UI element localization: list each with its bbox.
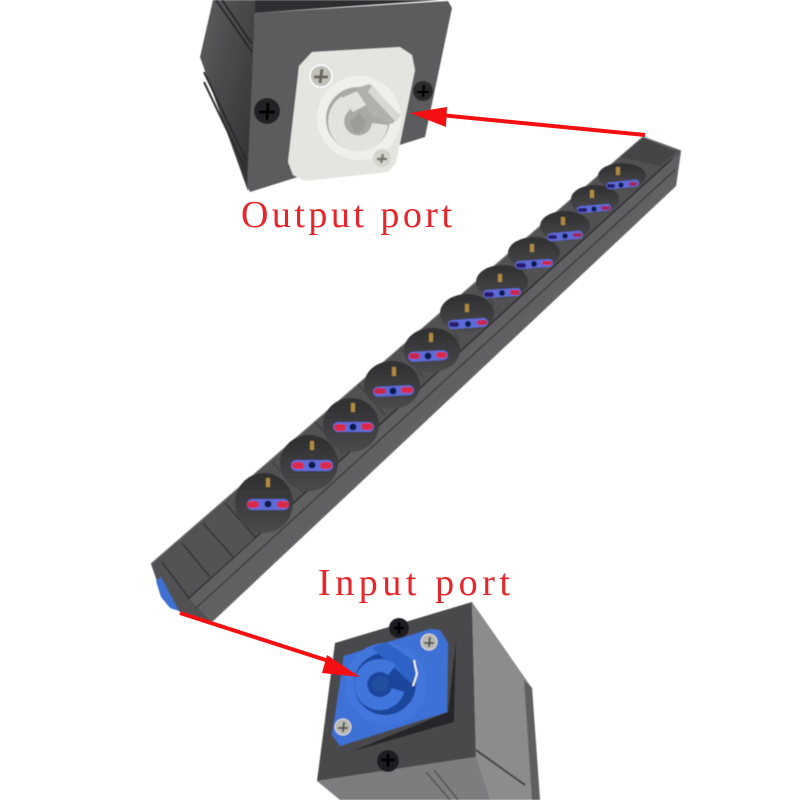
arrow to output port bbox=[410, 107, 645, 135]
end cap panel bbox=[620, 138, 676, 166]
output port photo bbox=[200, 0, 452, 192]
blue connector end bbox=[156, 577, 179, 611]
left screw bbox=[254, 98, 280, 124]
white plate screw top bbox=[310, 65, 332, 87]
socket 8 bbox=[508, 237, 560, 269]
socket 11 bbox=[598, 163, 646, 190]
socket 1 bbox=[235, 473, 293, 533]
blank panels bbox=[162, 504, 256, 597]
socket 9 bbox=[540, 211, 590, 242]
socket 10 bbox=[571, 185, 619, 213]
blue plate bbox=[332, 629, 448, 746]
socket 5 bbox=[404, 328, 460, 372]
blue plate screw bottom bbox=[335, 719, 351, 735]
right screw bbox=[413, 81, 433, 101]
enclosure bottom bbox=[317, 757, 490, 800]
socket 4 bbox=[364, 361, 420, 409]
enclosure face bbox=[317, 602, 476, 781]
arrow to input port bbox=[180, 613, 360, 677]
enclosure side bbox=[200, 0, 255, 191]
socket 2 bbox=[280, 435, 338, 491]
strip body bbox=[151, 137, 681, 622]
white connector slot bbox=[356, 84, 400, 124]
socket 7 bbox=[476, 265, 528, 299]
top screw bbox=[389, 618, 409, 638]
blue slot bbox=[372, 642, 418, 684]
white connector plate bbox=[288, 47, 415, 181]
blue plate shadow bbox=[350, 640, 456, 752]
blue core bbox=[361, 666, 398, 704]
output port label: Output port bbox=[241, 194, 452, 236]
socket dividers bbox=[272, 176, 612, 491]
input port photo bbox=[317, 602, 540, 800]
blue plate screw top bbox=[421, 634, 437, 650]
enclosure face bbox=[247, 1, 452, 192]
enclosure top edge bbox=[255, 0, 440, 13]
enclosure right side bbox=[472, 602, 540, 800]
socket 6 bbox=[440, 294, 494, 332]
blue ring bbox=[345, 643, 427, 725]
socket 3 bbox=[323, 398, 379, 452]
white connector ring bbox=[317, 76, 401, 160]
white connector core bbox=[336, 103, 380, 143]
white plate screw bottom bbox=[373, 149, 391, 167]
strip side rail bbox=[189, 151, 681, 622]
input port label: Input port bbox=[318, 562, 510, 604]
bottom screw bbox=[377, 750, 399, 772]
power strip bbox=[151, 137, 681, 622]
